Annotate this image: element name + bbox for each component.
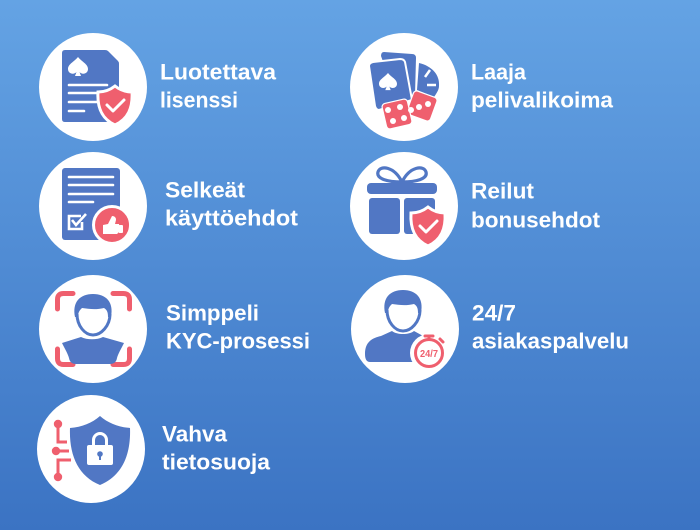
label: [166, 300, 310, 354]
label: käyttöehdot: [165, 206, 299, 230]
panel: Simppeli KYC-prosessi: [39, 275, 310, 383]
label: asiakaspalvelu: [472, 328, 629, 354]
label: Reilut: [471, 178, 534, 204]
icon: padlock shield with circuit: [37, 395, 145, 503]
label: tietosuoja: [162, 450, 270, 474]
label: pelivalikoima: [471, 88, 613, 112]
label: 24/7: [472, 300, 516, 326]
label: [472, 300, 629, 354]
label: KYC-prosessi: [166, 328, 310, 354]
panel: Reilut bonusehdot: [350, 152, 601, 260]
panel: 24/7 asiakaspalvelu: [351, 275, 629, 383]
label: Selkeät: [165, 178, 246, 202]
label: [165, 178, 299, 230]
icon: licence document with shield: [39, 33, 147, 141]
label: lisenssi: [160, 88, 238, 112]
label: [162, 422, 270, 474]
panel: Selkeät käyttöehdot: [39, 152, 299, 260]
icon: gift with shield: [350, 152, 458, 260]
icon: agent with stopwatch: 24/7: [420, 349, 438, 360]
icon: agent with stopwatch: [351, 275, 459, 383]
label: Luotettava: [160, 60, 276, 84]
label: Laaja: [471, 60, 526, 84]
label: Vahva: [162, 422, 227, 446]
label: bonusehdot: [471, 208, 601, 232]
panel: Luotettava lisenssi: [39, 33, 276, 141]
icon: terms document with thumbs up: [39, 152, 147, 260]
panel: Vahva tietosuoja: [37, 395, 270, 503]
icon: cards, wheel and dice: [350, 33, 458, 141]
label: Simppeli: [166, 300, 259, 326]
panel: Laaja pelivalikoima: [350, 33, 613, 141]
label: [471, 60, 613, 112]
label: [160, 60, 276, 112]
icon: face scan: [39, 275, 147, 383]
label: [471, 178, 601, 232]
